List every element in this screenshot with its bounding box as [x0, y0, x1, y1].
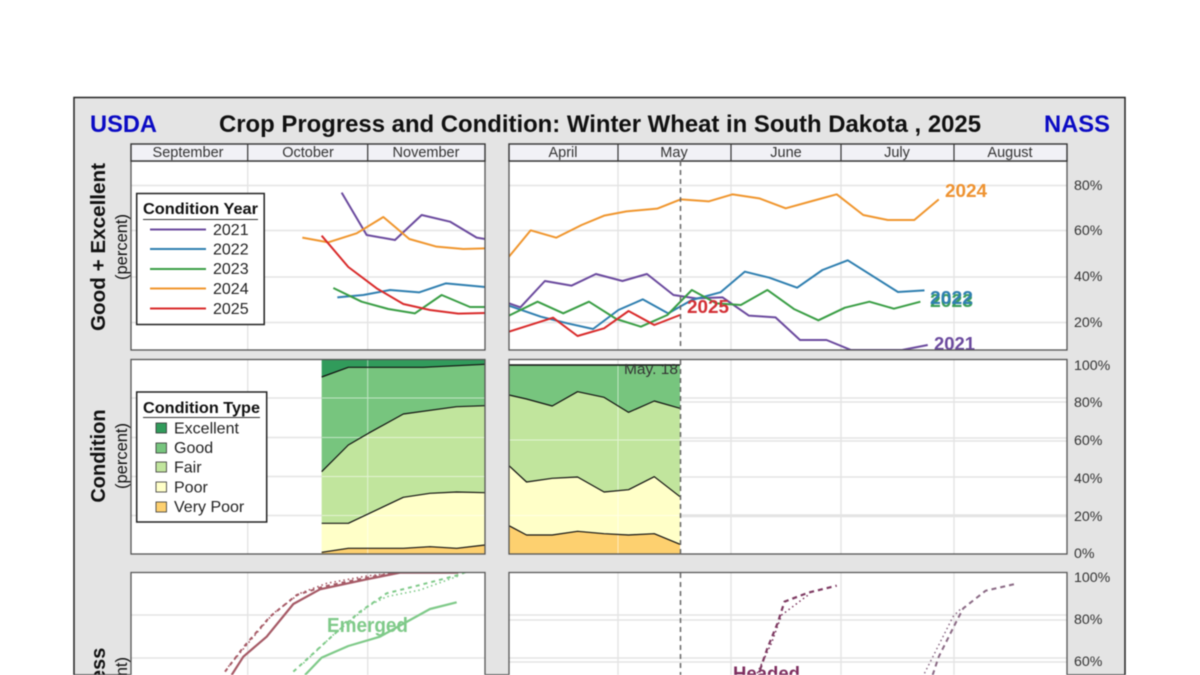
series label: Emerged: Emerged — [327, 615, 408, 637]
y axis ticks: progress: 80% — [1074, 612, 1103, 628]
date label: May 18: May. 18 — [624, 361, 678, 378]
panel: progress, spring — [509, 572, 1067, 675]
legend: condition year: 2022 — [213, 242, 249, 258]
y axis label: good + excellent: Good + Excellent — [88, 163, 110, 331]
y axis ticks: good plus excellent: 60% — [1074, 223, 1103, 239]
month header: fall: October — [282, 145, 334, 161]
month header: spring: April — [548, 145, 578, 161]
y axis ticks: progress — [1074, 570, 1111, 670]
legend: condition type: Good — [174, 440, 213, 457]
month header: spring — [509, 144, 1067, 161]
legend: condition type — [137, 392, 267, 522]
panel: condition, fall — [131, 359, 485, 554]
series label: 2023: 2023 — [930, 290, 973, 311]
month header: spring: May — [660, 145, 688, 161]
current date marker: dashed line — [680, 161, 682, 675]
series label: 2021: 2021 — [934, 333, 975, 354]
y axis label: condition: (percent) — [113, 423, 131, 489]
panel: condition, spring — [509, 359, 1067, 554]
legend: condition type: Condition Type — [143, 400, 260, 417]
y axis ticks: condition: 40% — [1074, 471, 1103, 487]
y axis ticks: condition: 20% — [1074, 509, 1103, 525]
month header: fall — [131, 144, 485, 161]
legend: condition year: 2024 — [213, 281, 249, 298]
legend: condition year: Condition Year — [143, 201, 258, 218]
y axis ticks: good plus excellent: 40% — [1074, 269, 1103, 285]
legend: condition year: 2025 — [213, 301, 249, 318]
month header: spring: June — [770, 145, 802, 161]
legend: condition type: Poor — [174, 480, 208, 496]
legend: condition year — [137, 194, 264, 324]
y axis ticks: condition: 0% — [1074, 546, 1095, 562]
series label: 2024: 2024 — [945, 180, 988, 201]
y axis ticks: progress: 100% — [1074, 570, 1111, 586]
panel: progress, fall — [131, 572, 485, 675]
series label: 2025: 2025 — [687, 296, 729, 317]
legend: condition type: Fair — [174, 460, 202, 476]
USDA label: USDA — [90, 111, 157, 138]
chart frame background — [74, 98, 1125, 675]
legend: condition type: Very Poor — [174, 499, 245, 516]
panel: good plus excellent, fall — [131, 161, 485, 350]
legend: condition type: Excellent — [174, 420, 239, 438]
legend: condition year: 2023 — [213, 261, 249, 278]
y axis ticks: good plus excellent: 20% — [1074, 315, 1103, 331]
y axis label: good + excellent — [88, 163, 131, 331]
title: Crop Progress and Condition: Winter Wheat in South Dakota , 2025 — [219, 111, 981, 138]
month header: fall: September — [153, 145, 224, 161]
y axis ticks: progress: 60% — [1074, 654, 1103, 670]
y axis label: condition: Condition — [88, 409, 110, 503]
month header: spring: August — [987, 145, 1033, 161]
month header: spring: July — [884, 145, 911, 161]
y axis ticks: condition — [1074, 358, 1111, 562]
y axis label: condition — [88, 409, 131, 503]
y axis ticks: condition: 60% — [1074, 433, 1103, 449]
series label: 2022: 2022 — [930, 287, 973, 308]
NASS label: NASS — [1044, 111, 1110, 138]
y axis ticks: condition: 80% — [1074, 395, 1103, 411]
y axis label: progress — [88, 648, 131, 675]
month header: fall: November — [393, 145, 460, 161]
panel: good plus excellent, spring — [509, 161, 1067, 354]
y axis ticks: condition: 100% — [1074, 358, 1111, 374]
y axis ticks: good plus excellent: 80% — [1074, 178, 1103, 194]
y axis label: good + excellent: (percent) — [113, 214, 131, 280]
y axis ticks: good plus excellent — [1074, 178, 1103, 331]
legend: condition year: 2021 — [213, 222, 249, 239]
